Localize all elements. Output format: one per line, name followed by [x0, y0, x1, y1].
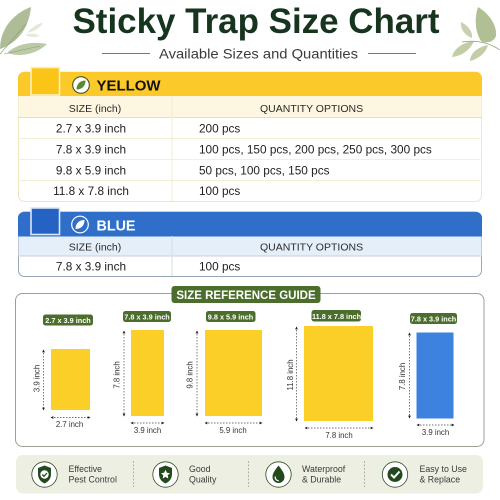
table headers: [69, 103, 363, 115]
table header: SIZE (inch): [69, 242, 121, 254]
heading: blue: BLUE: [96, 218, 136, 234]
table headers: SIZE (inch): [69, 103, 121, 115]
table rows: 50 pcs, 100 pcs, 150 pcs: [199, 164, 330, 178]
feature: good quality: [153, 462, 217, 487]
table rows: 200 pcs: [199, 122, 240, 136]
card: blue 7.8 x 3.9: 3.9 inch: [422, 428, 449, 437]
table row: [56, 260, 240, 274]
feature: effective pest control: [32, 462, 117, 487]
card: 2.7 x 3.9: 3.9 inch: [32, 365, 42, 392]
card: 7.8 x 3.9: [112, 311, 171, 435]
table rows: 7.8 x 3.9 inch: [56, 142, 126, 156]
card: 9.8 x 5.9: 9.8 inch: [186, 361, 194, 389]
feature: easy to use and replace: Easy to Use: [420, 464, 467, 474]
icon: right leaves: [452, 7, 500, 61]
feature: easy to use and replace: & Replace: [420, 474, 460, 484]
icon: left leaves: [0, 7, 47, 55]
title: Sticky Trap Size Chart: [72, 1, 440, 41]
heading: yellow: YELLOW: [96, 78, 161, 94]
feature: waterproof and durable: [266, 462, 346, 487]
card: 7.8 x 3.9: 7.8 x 3.9 inch: [124, 312, 170, 322]
table row: 100 pcs: [199, 260, 240, 274]
panel: feature strip: [16, 455, 483, 494]
panel: size reference guide: [16, 286, 484, 446]
card: 2.7 x 3.9: 2.7 inch: [56, 420, 83, 429]
feature: effective pest control: Pest Control: [68, 474, 117, 484]
table rows: 11.8 x 7.8 inch: [53, 184, 129, 198]
card: 7.8 x 3.9: 7.8 inch: [112, 361, 122, 389]
feature: good quality: Quality: [189, 474, 217, 484]
card: 11.8 x 7.8: 11.8 inch: [286, 359, 295, 391]
panel: yellow table: [18, 68, 482, 202]
icon: blue leaf badge: [72, 216, 88, 233]
card: 11.8 x 7.8: 7.8 inch: [325, 431, 353, 440]
feature: effective pest control: Effective: [68, 464, 102, 474]
feature: waterproof and durable: & Durable: [302, 474, 341, 484]
card: 2.7 x 3.9: 2.7 x 3.9 inch: [45, 316, 91, 325]
card: blue 7.8 x 3.9: 7.8 x 3.9 inch: [411, 314, 456, 324]
table header: QUANTITY OPTIONS: [260, 242, 363, 254]
table rows: 9.8 x 5.9 inch: [56, 164, 126, 178]
card: 9.8 x 5.9: 9.8 x 5.9 inch: [208, 312, 253, 322]
table row: 7.8 x 3.9 inch: [56, 260, 126, 274]
swatch: yellow: [31, 68, 60, 95]
icon: yellow leaf badge: [73, 77, 89, 93]
card: 2.7 x 3.9: [32, 314, 93, 429]
panel: blue table: [18, 208, 482, 276]
table header: [69, 242, 363, 254]
feature: easy to use and replace: [382, 462, 467, 487]
table rows: 100 pcs: [199, 184, 240, 198]
feature: good quality: Good: [189, 464, 211, 474]
card: 9.8 x 5.9: 5.9 inch: [219, 426, 247, 435]
table rows: 2.7 x 3.9 inch: [56, 122, 126, 136]
card: 7.8 x 3.9: 3.9 inch: [134, 426, 161, 435]
card: blue 7.8 x 3.9: 7.8 inch: [398, 363, 407, 390]
card: 9.8 x 5.9: [186, 311, 262, 435]
swatch: blue: [31, 208, 60, 234]
feature: waterproof and durable: Waterproof: [302, 464, 346, 474]
table rows: 100 pcs, 150 pcs, 200 pcs, 250 pcs, 300 pcs: [199, 142, 432, 156]
card: 11.8 x 7.8: 11.8 x 7.8 inch: [312, 312, 361, 321]
heading tab: [172, 286, 320, 303]
table headers: QUANTITY OPTIONS: [260, 103, 363, 115]
heading tab: SIZE REFERENCE GUIDE: [176, 290, 316, 302]
subtitle: Available Sizes and Quantities: [159, 46, 358, 62]
card: blue 7.8 x 3.9: [398, 313, 457, 437]
table rows: [53, 122, 432, 198]
card: 11.8 x 7.8: [286, 310, 373, 440]
